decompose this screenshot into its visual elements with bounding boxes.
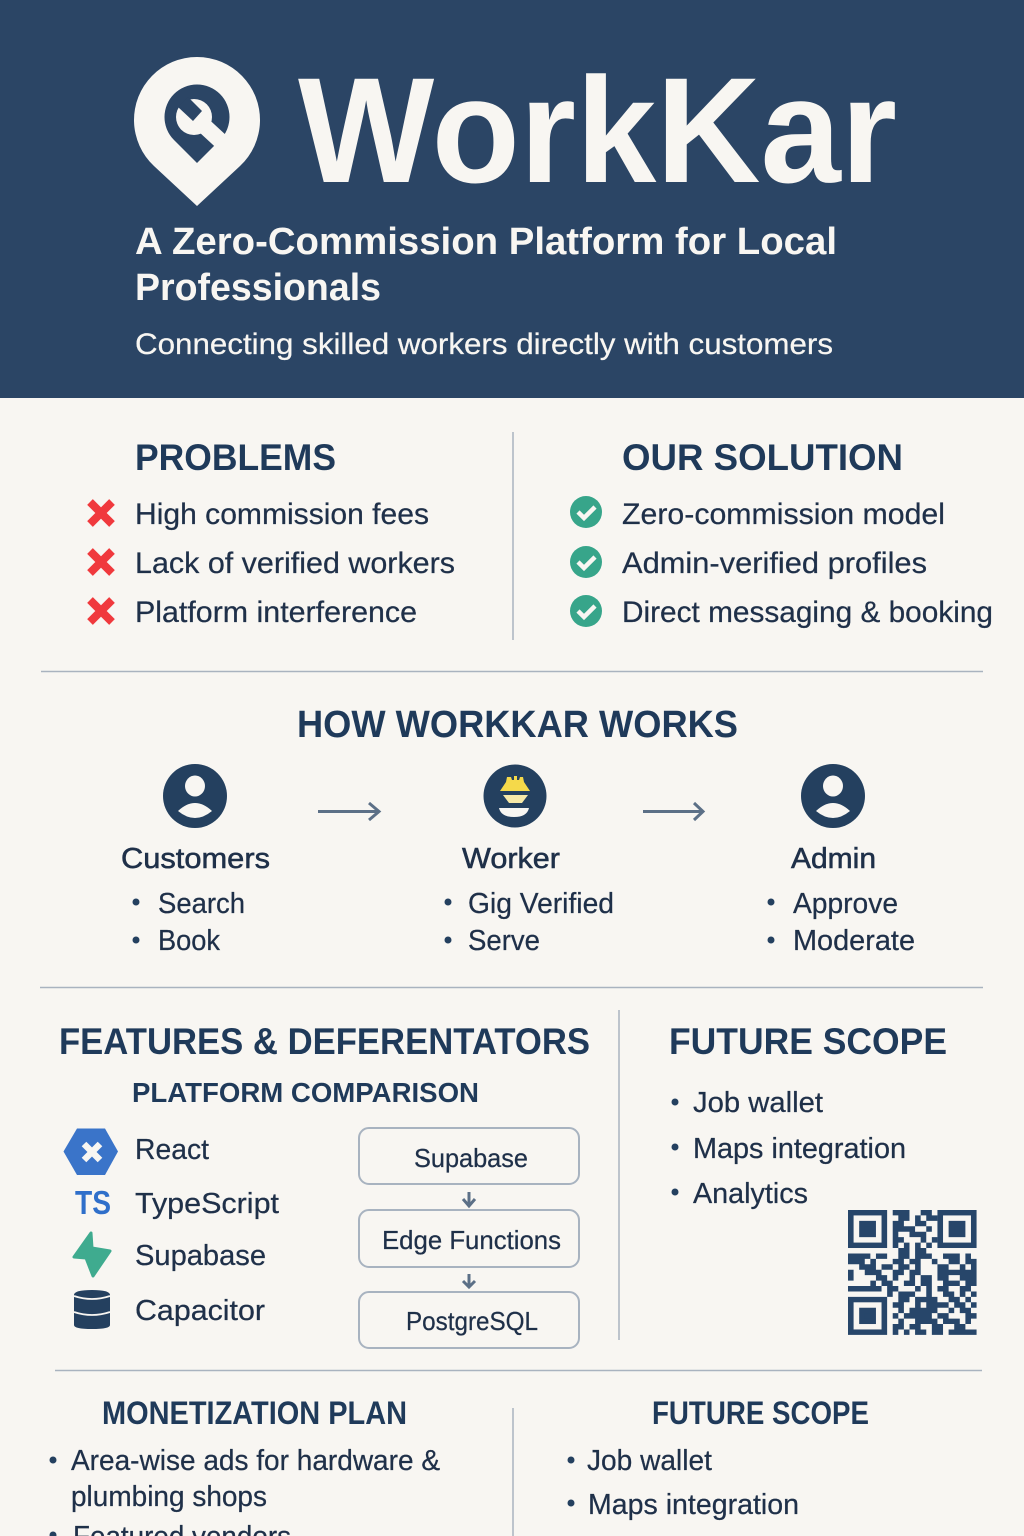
icon: worker with hard hat [484,764,546,828]
capacitor label: Capacitor [135,1295,265,1327]
icon: typescript: TS [75,1184,111,1221]
customers label: Customers [121,843,270,875]
icon: location pin with wrench [134,57,260,206]
future scope list: Job wallet [693,1087,823,1119]
heading: features: FEATURES & DEFERENTATORS [59,1021,590,1062]
worker label: Worker [462,843,560,875]
icon: green check 1 [570,496,602,528]
customers list: Book [158,925,220,957]
title: WorkKar [298,46,897,214]
icon: green check 2 [570,546,602,578]
react label: React [135,1134,209,1166]
panel: features and differentiators [59,1021,590,1348]
arrow: supabase to edge functions [463,1192,475,1206]
subtitle [135,221,837,309]
subheading: platform comparison: PLATFORM COMPARISON [132,1077,479,1108]
future scope lower list: Maps integration [588,1489,799,1521]
subtitle: A Zero-Commission Platform for Local [135,221,837,263]
QR code [848,1213,977,1332]
icon: database [74,1290,110,1329]
icon: react hexagon [64,1128,118,1175]
solution item 3: Direct messaging & booking [622,596,993,629]
future scope lower list [568,1445,799,1521]
worker list [444,888,614,957]
subtitle: Professionals [135,267,381,309]
panel: our solution [570,437,993,629]
heading: future scope: FUTURE SCOPE [669,1021,947,1062]
heading: how workkar works: HOW WORKKAR WORKS [297,704,738,746]
box: edge functions: Edge Functions [382,1225,561,1255]
problem item 1: High commission fees [135,498,429,531]
heading: problems: PROBLEMS [135,437,336,478]
panel: problems [90,437,455,629]
icon: red cross 3 [90,600,112,622]
customers list [132,888,245,957]
arrow: customers to worker [318,803,379,820]
future scope lower list: Job wallet [587,1445,712,1477]
icon: customer [163,764,227,828]
admin list: Moderate [793,925,915,957]
header banner [0,0,1024,398]
solution item 2: Admin-verified profiles [622,547,927,580]
box: supabase: Supabase [414,1143,528,1173]
heading: monetization plan: MONETIZATION PLAN [102,1395,407,1431]
monetization list: plumbing shops [71,1481,267,1513]
icon: admin [801,764,865,828]
icon: red cross 1 [90,502,112,524]
customers list: Search [158,888,245,920]
problem item 2: Lack of verified workers [135,547,455,580]
icon: supabase bolt [74,1233,110,1276]
heading: our solution: OUR SOLUTION [622,437,903,478]
monetization list [50,1445,440,1536]
panel: future scope lower [568,1395,869,1521]
panel: monetization plan [50,1395,440,1536]
icon: green check 3 [570,595,602,627]
box: supabase [359,1128,579,1184]
arrow: edge functions to postgresql [463,1274,475,1287]
future scope list [672,1087,906,1210]
problem item 3: Platform interference [135,596,417,629]
future scope list: Maps integration [693,1133,906,1165]
icon: red cross 2 [90,551,112,573]
tagline: Connecting skilled workers directly with customers [135,328,833,361]
admin list [768,888,915,957]
monetization list: Area-wise ads for hardware & [71,1445,440,1477]
supabase label: Supabase [135,1240,266,1272]
panel: future scope [669,1021,977,1332]
box: edge functions [359,1210,579,1267]
solution item 1: Zero-commission model [622,498,945,531]
arrow: worker to admin [643,803,703,820]
worker list: Serve [468,925,540,957]
box: postgresql [359,1292,579,1348]
admin label: Admin [791,843,876,875]
admin list: Approve [793,888,898,920]
panel: how workkar works [121,704,915,957]
typescript label: TypeScript [135,1188,279,1220]
box: postgresql: PostgreSQL [406,1306,538,1336]
future scope list: Analytics [693,1178,808,1210]
heading: future scope lower: FUTURE SCOPE [652,1395,869,1431]
worker list: Gig Verified [468,888,614,920]
